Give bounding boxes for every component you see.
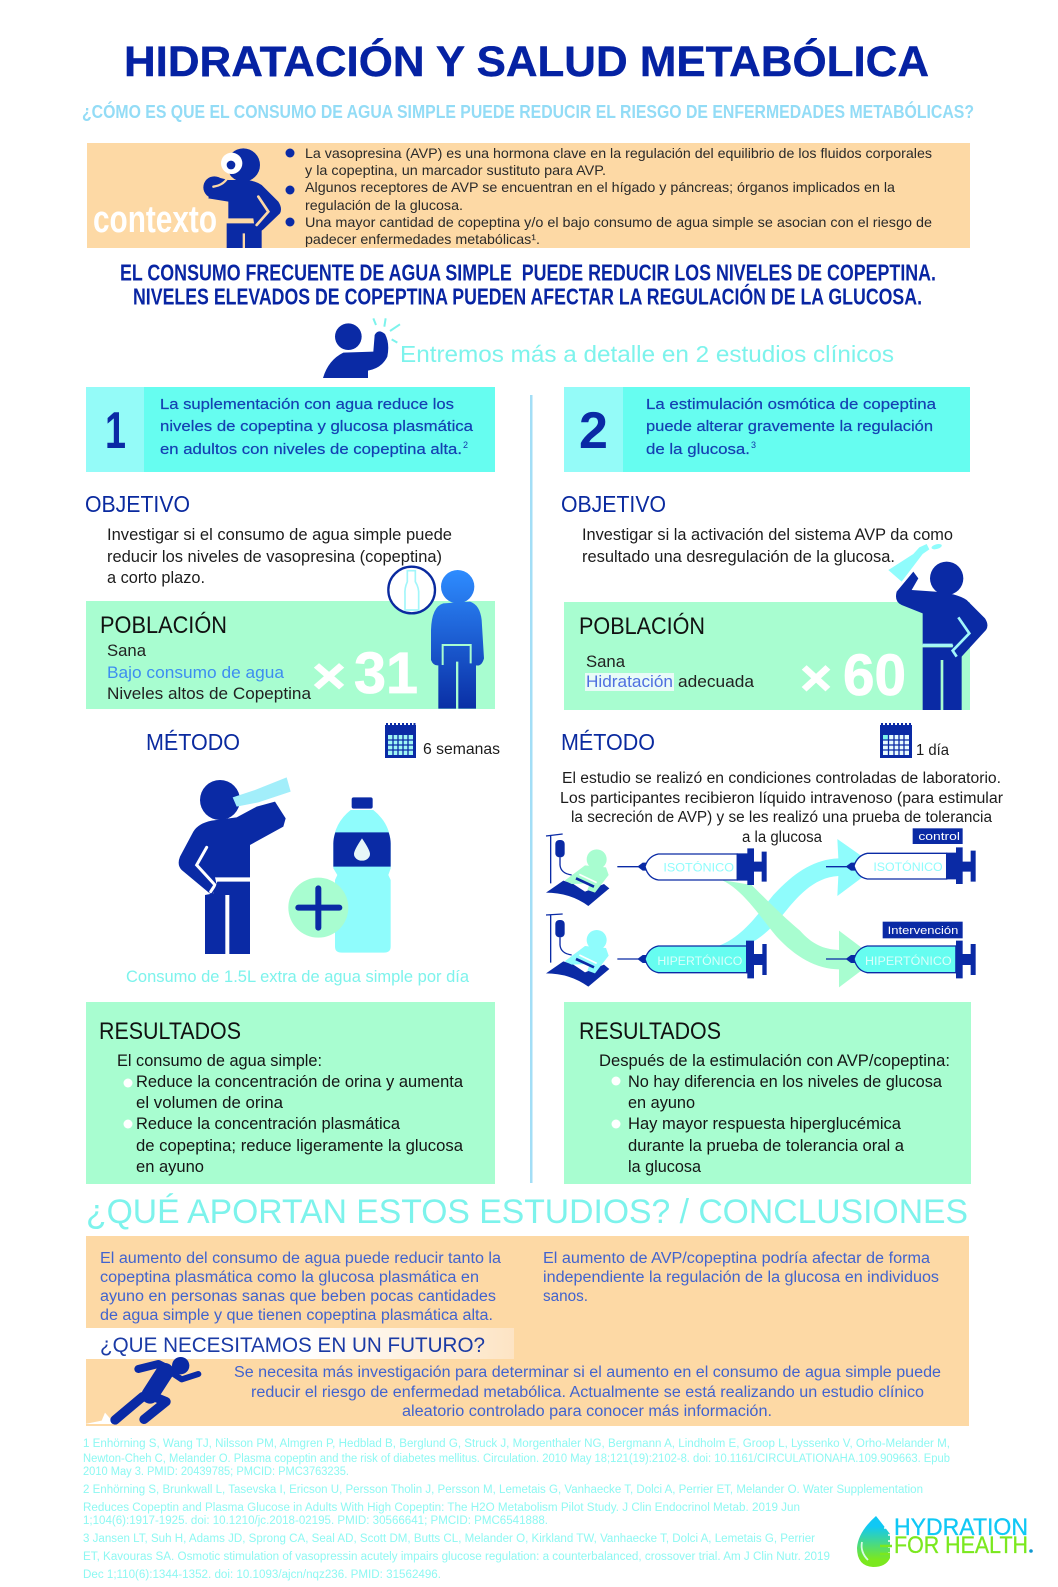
panel: study 2 header: La estimulación osmótica de copeptina xyxy=(646,396,937,413)
panel: contexto xyxy=(87,143,974,248)
patient: isotonic xyxy=(546,834,609,906)
logo: Hydration for Health: HYDRATION xyxy=(894,1514,1028,1541)
panel: results 2: Después de la estimulación con AVP/copeptina: xyxy=(599,1051,950,1070)
panel: results 1: Reduce la concentración plasmática xyxy=(136,1114,401,1133)
key message heading xyxy=(120,260,936,310)
panel: results 1 xyxy=(86,1002,495,1184)
multiplier ×31: 31 xyxy=(354,641,418,706)
objective 1: a corto plazo. xyxy=(107,569,205,587)
panel: study 1 header xyxy=(86,387,495,472)
icon: person pouring bottle xyxy=(888,543,987,710)
icon: person raising hand xyxy=(323,318,400,378)
panel: results 2: RESULTADOS xyxy=(579,1018,721,1045)
syringe: hypertonic right xyxy=(826,941,976,978)
icon: calendar 1 day xyxy=(880,723,912,758)
references: ET, Kavouras SA. Osmotic stimulation of vasopressin acutely impairs glucose regulation: a counterbalanced, crossover trial. Am J Clin Nutr. 2019 xyxy=(83,1551,830,1563)
section intro: Entremos más a detalle en 2 estudios clínicos xyxy=(400,341,894,367)
objective 2 xyxy=(561,491,953,566)
icon: runner xyxy=(85,1357,198,1424)
panel: study 1 header: niveles de copeptina y glucosa plasmática xyxy=(160,418,474,435)
arrow: isotonic to hypertonic xyxy=(722,880,877,987)
references: Newton-Cheh C, Melander O. Plasma copeptin and the risk of diabetes mellitus. Circulation. 2010 May 18;121(19):2102-8. doi: 10.1161/CIRCULATIONAHA.109.909663. Epub xyxy=(83,1453,950,1465)
panel: study 1 header: 1 xyxy=(105,402,126,460)
bullet list: padecer enfermedades metabólicas¹. xyxy=(305,232,540,247)
panel: results 2: No hay diferencia en los niveles de glucosa xyxy=(628,1072,943,1091)
panel: results 2: Hay mayor respuesta hiperglucémica xyxy=(628,1114,902,1133)
panel: population 1: Niveles altos de Copeptina xyxy=(107,684,312,703)
panel: results 1: RESULTADOS xyxy=(99,1018,241,1045)
icon: logo drop xyxy=(857,1516,892,1567)
multiplier ×60: × xyxy=(800,650,832,706)
icon: person with magnifying glass xyxy=(203,148,281,248)
method 2 description xyxy=(560,770,1003,846)
method 2 heading: MÉTODO xyxy=(561,729,655,755)
panel: results 1: El consumo de agua simple: xyxy=(117,1051,322,1070)
references: 2010 May 3. PMID: 20439785; PMCID: PMC3763235. xyxy=(83,1466,349,1478)
bullet list: Algunos receptores de AVP se encuentran en el hígado y páncreas; órganos implicados en la xyxy=(305,180,895,195)
bullet list: La vasopresina (AVP) es una hormona clave en la regulación del equilibrio de los fluidos corporales xyxy=(305,146,932,161)
syringe: hypertonic left xyxy=(617,941,767,978)
tag: control xyxy=(913,828,963,844)
icon: person drinking water xyxy=(179,777,291,954)
conclusion text left xyxy=(100,1250,501,1324)
panel: study 2 header: 3 xyxy=(751,440,756,450)
multiplier ×31 xyxy=(312,641,418,706)
panel: study 2 header: 2 xyxy=(579,402,608,460)
objective 1: reducir los niveles de vasopresina (copeptina) xyxy=(107,548,442,566)
future heading: ¿QUE NECESITAMOS EN UN FUTURO? xyxy=(100,1333,485,1357)
future text: aleatorio controlado para conocer más información. xyxy=(402,1403,772,1420)
references: Reduces Copeptin and Plasma Glucose in Adults With High Copeptin: The H2O Metabolism Pilot Study. J Clin Endocrinol Metab. 2019 Jun xyxy=(83,1502,800,1514)
references: Dec 1;110(6):1344-1352. doi: 10.1093/ajcn/nqz236. PMID: 31562496. xyxy=(83,1569,441,1581)
tag: intervención xyxy=(883,922,963,938)
logo: Hydration for Health: FOR HEALTH xyxy=(894,1532,1028,1559)
panel: results 1: el volumen de orina xyxy=(136,1093,284,1112)
panel: conclusions xyxy=(85,1236,969,1426)
tag: intervención: Intervención xyxy=(888,925,958,937)
syringe: isotonic right: ISOTÓNICO xyxy=(873,859,943,874)
panel: population 1 xyxy=(86,567,495,709)
conclusion text left: ayuno en personas sanas que beben pocas cantidades xyxy=(100,1288,496,1305)
duration 1: 6 semanas xyxy=(423,741,500,758)
method 1 heading: MÉTODO xyxy=(146,729,240,755)
bullet list: y la copeptina, un marcador sustituto para AVP. xyxy=(305,163,606,178)
panel: study 1 header: 2 xyxy=(463,440,468,450)
method 2 description: la secreción de AVP) y se les realizó una prueba de tolerancia xyxy=(571,809,992,826)
syringe: hypertonic right: HIPERTÓNICO xyxy=(865,953,952,968)
tag: control: control xyxy=(918,831,960,843)
future text: reducir el riesgo de enfermedad metabólica. Actualmente se está realizando un estudio clínico xyxy=(251,1384,924,1401)
panel: study 1 header: La suplementación con agua reduce los xyxy=(160,396,454,413)
references: 1 Enhörning S, Wang TJ, Nilsson PM, Almgren P, Hedblad B, Berglund G, Struck J, Morgenthaler NG, Bergmann A, Lindholm E, Groop L, Lyssenko V, Orho-Melander M, xyxy=(83,1438,950,1450)
multiplier ×60: 60 xyxy=(843,643,906,708)
panel: population 2: Sana xyxy=(586,652,626,671)
conclusion text left: copeptina plasmática como la glucosa plasmática en xyxy=(100,1269,479,1286)
panel: population 2: Hidratación xyxy=(586,672,673,691)
panel: results 1: Reduce la concentración de orina y aumenta xyxy=(136,1072,464,1091)
references: 1;104(6):1917-1925. doi: 10.1210/jc.2018-02195. PMID: 30566641; PMCID: PMC6541888. xyxy=(83,1515,548,1527)
panel: results 2: en ayuno xyxy=(628,1093,695,1112)
duration 2: 1 día xyxy=(916,742,949,759)
multiplier ×31: × xyxy=(312,648,346,704)
icon: person gradient xyxy=(431,570,484,709)
panel: results 1: en ayuno xyxy=(136,1157,204,1176)
method 2 description: El estudio se realizó en condiciones controladas de laboratorio. xyxy=(562,770,1001,787)
logo: Hydration for Health xyxy=(857,1514,1033,1567)
conclusion text right: independiente la regulación de la glucosa en individuos xyxy=(543,1269,939,1286)
bullet list: regulación de la glucosa. xyxy=(305,198,463,213)
conclusion text right: sanos. xyxy=(543,1288,588,1305)
panel: study 2 header xyxy=(564,387,970,472)
objective 2: OBJETIVO xyxy=(561,491,666,517)
conclusion text left: de agua simple y que tienen copeptina plasmática alta. xyxy=(100,1307,493,1324)
syringe: isotonic left: ISOTÓNICO xyxy=(663,860,734,875)
panel: population 1: Bajo consumo de agua xyxy=(107,663,285,682)
conclusion text right: El aumento de AVP/copeptina podría afectar de forma xyxy=(543,1250,930,1267)
conclusion text right xyxy=(543,1250,939,1305)
panel: study 2 header: de la glucosa. xyxy=(646,441,750,458)
panel: population 2 xyxy=(564,543,987,710)
references: 2 Enhörning S, Brunkwall L, Tasevska I, Ericson U, Persson Tholin J, Persson M, Lemetais G, Vanhaecke T, Dolci A, Perrier ET, Melander O. Water Supplementation xyxy=(83,1484,923,1496)
objective 1: Investigar si el consumo de agua simple puede xyxy=(107,526,452,544)
objective 1 xyxy=(85,491,452,587)
syringe: hypertonic left: HIPERTÓNICO xyxy=(657,953,742,968)
panel: study 1 header: en adultos con niveles de copeptina alta. xyxy=(160,441,462,458)
future text xyxy=(234,1364,941,1420)
references: 3 Jansen LT, Suh H, Adams JD, Sprong CA, Seal AD, Scott DM, Butts CL, Melander O, Kirkland TW, Vanhaecke T, Dolci A, Lemetais G, Perrier xyxy=(83,1533,815,1545)
icon: calendar 6 weeks xyxy=(385,723,416,758)
panel: population 2: POBLACIÓN xyxy=(579,613,705,640)
icon: bottle in circle xyxy=(388,567,435,613)
method 2 description: Los participantes recibieron líquido intravenoso (para estimular xyxy=(560,790,1003,807)
bullet list xyxy=(286,146,932,247)
conclusion text left: El aumento del consumo de agua puede reducir tanto la xyxy=(100,1250,501,1267)
panel: results 2: la glucosa xyxy=(628,1157,702,1176)
caption: 1.5L extra: Consumo de 1.5L extra de agua simple por día xyxy=(126,968,470,986)
title: HIDRATACIÓN Y SALUD METABÓLICA xyxy=(124,37,929,86)
objective 1: OBJETIVO xyxy=(85,491,190,517)
bullet list: Una mayor cantidad de copeptina y/o el bajo consumo de agua simple se asocian con el riesgo de xyxy=(305,215,932,230)
arrow: hypertonic to isotonic xyxy=(718,839,877,946)
label: contexto: contexto xyxy=(93,199,217,241)
syringe: isotonic left xyxy=(617,848,767,885)
icon: water bottle with plus xyxy=(288,797,391,953)
conclusions heading: ¿QUÉ APORTAN ESTOS ESTUDIOS? / CONCLUSIONES xyxy=(86,1193,968,1231)
references xyxy=(83,1438,950,1581)
panel: results 1: de copeptina; reduce ligeramente la glucosa xyxy=(136,1136,464,1155)
syringe: isotonic right xyxy=(826,847,976,884)
panel: study 2 header: puede alterar gravemente la regulación xyxy=(646,418,933,435)
panel: population 2: adecuada xyxy=(678,672,755,691)
panel: population 1: POBLACIÓN xyxy=(100,612,227,639)
patient: hypertonic xyxy=(546,914,609,987)
method 2 description: a la glucosa xyxy=(742,829,822,846)
future text: Se necesita más investigación para determinar si el aumento en el consumo de agua simple puede xyxy=(234,1364,941,1381)
panel: results 2: durante la prueba de tolerancia oral a xyxy=(628,1136,905,1155)
objective 2: Investigar si la activación del sistema AVP da como xyxy=(582,526,953,544)
objective 2: resultado una desregulación de la glucosa. xyxy=(582,548,895,566)
multiplier ×60 xyxy=(800,643,906,708)
panel: population 1: Sana xyxy=(107,641,147,660)
panel: results 2 xyxy=(564,1002,971,1184)
divider xyxy=(530,395,532,1183)
crossover diagram xyxy=(546,828,976,987)
